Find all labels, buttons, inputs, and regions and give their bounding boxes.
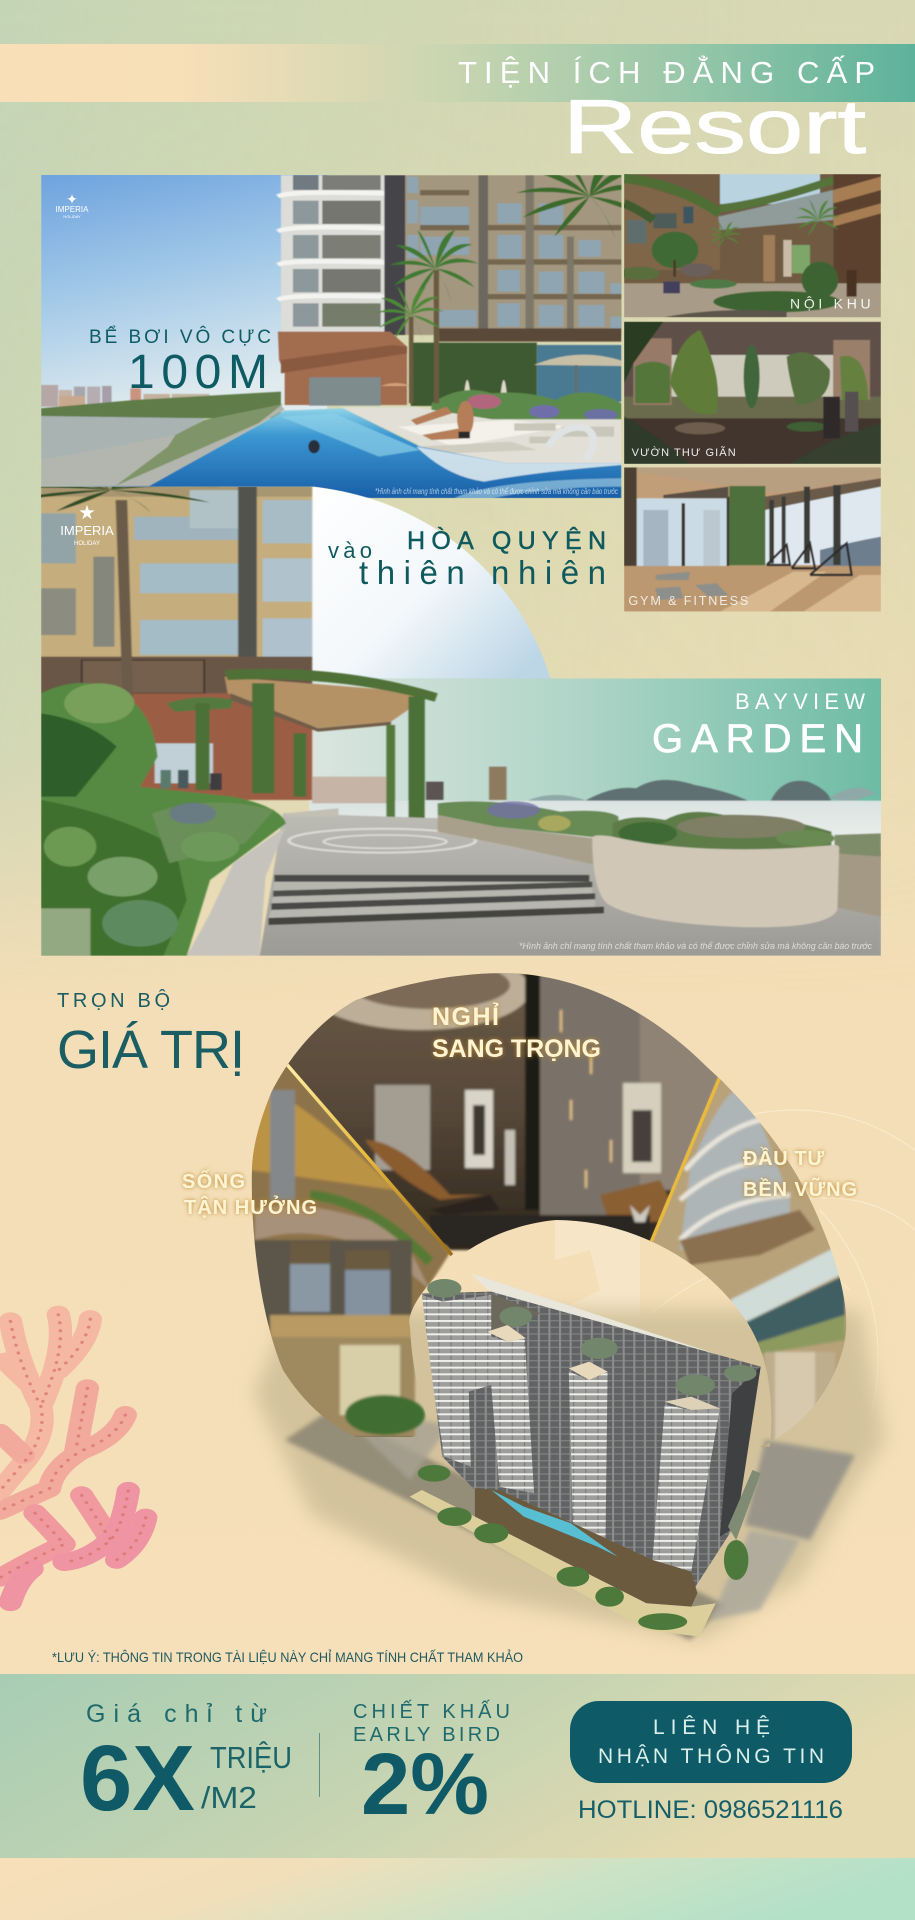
palms xyxy=(434,270,439,403)
contour lines decoration xyxy=(620,1110,915,1420)
price block xyxy=(80,1700,292,1830)
pergola xyxy=(225,677,432,728)
pool panel text: 100M xyxy=(128,346,268,399)
ground aerial view xyxy=(254,1310,885,1640)
umbrellas xyxy=(534,355,622,366)
title: TIỆN ÍCH ĐẲNG CẤP xyxy=(458,55,875,90)
bayview garden label: GARDEN xyxy=(652,717,863,761)
watermark xyxy=(555,1220,640,1350)
stairs xyxy=(268,875,604,925)
left shrubs xyxy=(41,683,286,956)
person silhouettes xyxy=(160,767,506,800)
swimmer xyxy=(308,440,320,453)
photo collage: three value segments xyxy=(240,950,860,1450)
photo disclaimers: *Hình ảnh chỉ mang tính chất tham khảo và có thể được chỉnh sửa mà không cần báo trước xyxy=(519,941,872,951)
section heading: value: GIÁ TRỊ xyxy=(57,1020,245,1080)
deck and loungers xyxy=(342,406,622,464)
water xyxy=(41,408,622,498)
pool panel text xyxy=(89,326,271,399)
contact button xyxy=(570,1701,852,1783)
right slab xyxy=(720,1367,761,1537)
title xyxy=(458,55,875,170)
garden logo: ★ xyxy=(79,505,95,522)
lake xyxy=(41,416,206,460)
tower two xyxy=(487,1335,534,1493)
coral illustration xyxy=(0,1315,146,1602)
isometric tower model xyxy=(410,1273,761,1637)
garden heading: HÒA QUYỆN xyxy=(407,526,606,555)
hotline: HOTLINE: 0986521116 xyxy=(578,1796,843,1824)
photo panel: interior courtyard xyxy=(620,174,881,317)
price block: /M2 xyxy=(201,1780,257,1815)
garden heading xyxy=(328,526,606,591)
collage labels: BỀN VỮNG xyxy=(743,1177,857,1201)
tower left xyxy=(278,175,386,332)
page background xyxy=(0,0,915,956)
paved floor xyxy=(260,813,881,956)
photo panel: gym and fitness xyxy=(624,467,881,612)
building facade xyxy=(41,487,388,803)
photo panel: relaxation garden xyxy=(624,322,881,464)
bottom strip xyxy=(0,1858,915,1920)
price block: 6X xyxy=(80,1726,195,1830)
pool sky xyxy=(41,175,327,415)
roof gardens xyxy=(427,1279,757,1396)
collage labels: ĐẦU TƯ xyxy=(743,1147,824,1170)
early bird discount: EARLY BIRD xyxy=(353,1724,500,1746)
round stone planter xyxy=(592,812,839,927)
tower four xyxy=(652,1405,720,1572)
green wall xyxy=(411,343,537,406)
tower one xyxy=(422,1295,491,1467)
gardens xyxy=(418,1465,748,1630)
pool panel text: BỂ BƠI VÔ CỰC xyxy=(89,326,271,348)
price block: Giá chỉ từ xyxy=(86,1700,267,1728)
sea xyxy=(309,801,884,851)
palm tree xyxy=(114,500,134,698)
segment: sustainable investment facade xyxy=(650,1073,860,1450)
back tower mass xyxy=(422,1292,761,1593)
section heading: value: TRỌN BỘ xyxy=(57,989,170,1012)
low planter wall xyxy=(438,815,595,865)
garden logo: HOLIDAY xyxy=(74,541,100,547)
teal sky xyxy=(309,678,884,812)
collage labels: TẬN HƯỞNG xyxy=(184,1195,317,1219)
early bird discount: CHIẾT KHẤU xyxy=(353,1700,510,1723)
photo disclaimers xyxy=(375,487,872,951)
label: Vườn thư giãn: VƯỜN THƯ GIÃN xyxy=(632,446,736,459)
white rooftop terrace xyxy=(471,1273,744,1378)
early bird discount: 2% xyxy=(361,1736,489,1833)
sand walkway xyxy=(410,1490,716,1637)
photo panel: bayview garden xyxy=(0,465,884,956)
sunbathers xyxy=(411,401,474,440)
pool logo: IMPERIA xyxy=(56,205,89,214)
segment: enjoy living podium xyxy=(240,1063,450,1440)
footer band xyxy=(0,1674,915,1858)
contact button: NHẬN THÔNG TIN xyxy=(598,1745,824,1768)
podium xyxy=(475,1488,697,1607)
pool logo: ✦ xyxy=(66,191,78,207)
contact button: LIÊN HỆ xyxy=(653,1716,770,1739)
section heading: value xyxy=(57,989,245,1080)
title: Resort xyxy=(563,85,866,170)
pool logo xyxy=(56,191,89,219)
garden logo xyxy=(60,505,114,547)
tower three xyxy=(569,1372,608,1538)
islands xyxy=(584,780,831,802)
garden heading: vào xyxy=(328,538,372,563)
pool logo: HOLIDAY xyxy=(63,214,81,219)
label: Gym & Fitness: GYM & FITNESS xyxy=(628,594,748,608)
collage labels: SANG TRỌNG xyxy=(432,1035,601,1063)
distant city xyxy=(41,385,281,418)
early bird discount xyxy=(353,1700,510,1833)
fountain xyxy=(548,427,593,460)
gold divider lines xyxy=(283,1060,722,1255)
coral pores xyxy=(0,1315,146,1578)
label: Nội khu: NỘI KHU xyxy=(790,295,871,311)
garden logo: IMPERIA xyxy=(60,523,114,538)
white sky swoosh xyxy=(309,487,554,680)
title band xyxy=(0,44,915,102)
collage labels: NGHỈ xyxy=(432,1001,499,1031)
plants xyxy=(430,390,622,420)
photo disclaimers: *Hình ảnh chỉ mang tính chất tham khảo và có thể được chỉnh sửa mà không cần báo trước xyxy=(375,487,618,496)
podium xyxy=(278,332,407,405)
price block: TRIỆU xyxy=(210,1740,292,1775)
price divider xyxy=(319,1733,320,1797)
segment: luxury stay lobby xyxy=(284,973,726,1252)
garden heading: thiên nhiên xyxy=(359,554,606,591)
tower right xyxy=(405,175,623,342)
collage labels xyxy=(182,1001,857,1219)
collage labels: SỐNG xyxy=(182,1169,245,1193)
footnote: *LƯU Ý: THÔNG TIN TRONG TÀI LIỆU NÀY CHỈ MANG TÍNH CHẤT THAM KHẢO xyxy=(52,1649,523,1665)
bayview garden label: BAYVIEW xyxy=(735,689,865,714)
bayview garden label xyxy=(652,689,865,761)
photo panel: infinity pool xyxy=(41,174,622,498)
